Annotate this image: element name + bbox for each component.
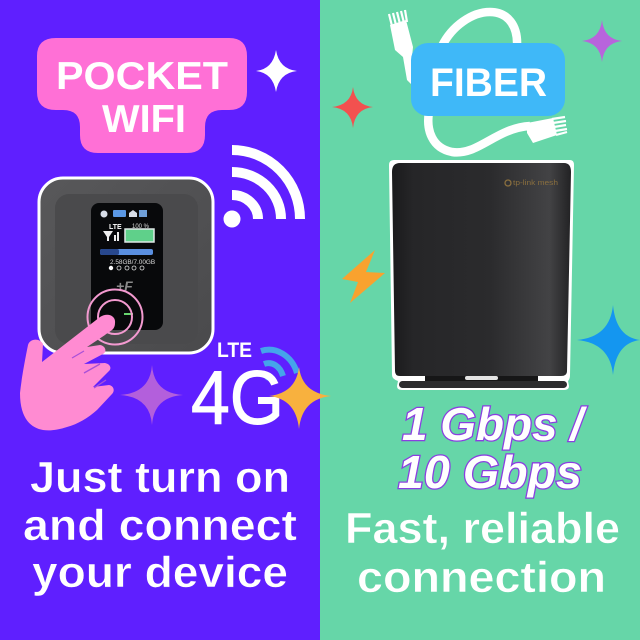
badge: pocket wifi [37, 38, 247, 153]
device: pocket wifi router [39, 178, 213, 353]
device screen: 100 % [132, 224, 150, 230]
badge: fiber [411, 43, 565, 116]
text: pocket wifi description: Just turn on [30, 453, 290, 502]
brand logo: tp-link mesh [513, 180, 558, 187]
device: fiber router [389, 160, 574, 390]
icon: red sparkle [332, 87, 373, 128]
badge: pocket wifi: POCKET [56, 55, 228, 98]
device screen: 2.58GB/7.00GB [110, 259, 155, 266]
press rings [88, 290, 142, 344]
icon: violet sparkle [582, 20, 622, 62]
icon: wifi signal [224, 150, 300, 228]
device screen: +F [116, 278, 133, 294]
badge: pocket wifi: WIFI [102, 98, 186, 141]
icon: purple sparkle [120, 365, 183, 425]
text: pocket wifi description: your device [32, 548, 288, 597]
text: fiber description: connection [357, 553, 606, 602]
icon: ethernet cable [389, 10, 567, 152]
icon: lightning bolt [342, 250, 385, 303]
text: fiber speed [398, 398, 587, 498]
badge: fiber: FIBER [430, 61, 547, 105]
icon: gold sparkle [269, 367, 331, 429]
router base [399, 376, 567, 388]
right connector [527, 118, 557, 143]
text: fiber description [345, 504, 620, 602]
text: pocket wifi description: and connect [23, 501, 297, 550]
device screen: LTE [109, 224, 122, 231]
icon: pointing hand [20, 315, 115, 430]
icon: blue sparkle [577, 305, 640, 375]
text: fiber description: Fast, reliable [345, 504, 620, 553]
panel: fiber background [320, 0, 640, 640]
icon: white sparkle [256, 50, 297, 92]
text: fiber speed: 10 Gbps [398, 446, 582, 498]
icon: LTE 4G: LTE [217, 339, 252, 362]
icon: LTE 4G: 4G [191, 356, 284, 441]
panel: pocket wifi background [0, 0, 320, 640]
device screen [91, 203, 163, 330]
text: fiber speed: 1 Gbps / [402, 398, 587, 450]
text: pocket wifi description [23, 453, 297, 597]
left connector [390, 20, 413, 85]
